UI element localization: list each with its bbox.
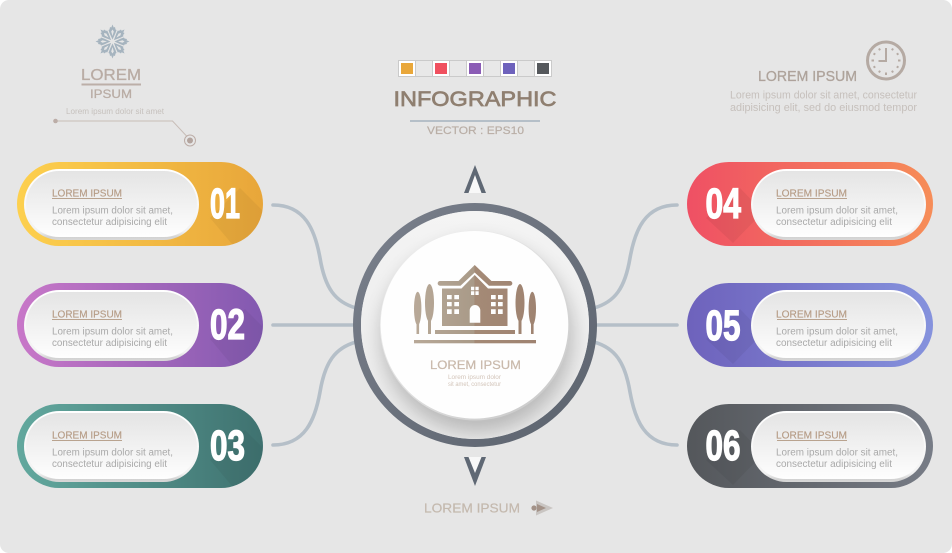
text 06 — [776, 448, 898, 470]
logo word IPSUM: IPSUM — [90, 89, 132, 101]
icon: down arrow — [464, 457, 486, 486]
number 05: 05 — [706, 303, 740, 350]
connector lines — [273, 205, 677, 445]
description: Lorem ipsum dolor sit amet, consectetur — [730, 90, 917, 102]
icon: clock — [868, 42, 904, 79]
logo caption: Lorem ipsum dolor sit amet — [66, 107, 165, 116]
text 05: Lorem ipsum dolor sit amet, — [776, 326, 898, 338]
top-right clock block — [730, 42, 917, 114]
text 02: Lorem ipsum dolor sit amet, — [52, 326, 173, 338]
heading: LOREM IPSUM — [758, 69, 857, 85]
title: INFOGRAPHIC — [394, 87, 556, 111]
hub caption: Lorem ipsum dolor — [448, 375, 501, 381]
text 06: Lorem ipsum dolor sit amet, — [776, 448, 898, 458]
pointer line with target — [53, 119, 196, 146]
hub caption: sit amet, consectetur — [448, 382, 501, 388]
text 05 — [776, 326, 898, 349]
top-left logo block — [53, 24, 196, 146]
heading 04: LOREM IPSUM — [776, 188, 847, 200]
text 03 — [52, 448, 173, 470]
text 03: consectetur adipisicing elit — [52, 459, 167, 470]
text 03: Lorem ipsum dolor sit amet, — [52, 448, 173, 458]
text 06: consectetur adipisicing elit — [776, 459, 892, 470]
text 01 — [52, 206, 173, 228]
hub caption — [448, 375, 501, 388]
panel: item 05 — [687, 283, 933, 367]
heading 02: LOREM IPSUM — [52, 310, 122, 320]
description: adipisicing elit, sed do eiusmod tempor — [730, 102, 917, 114]
text 05: consectetur adipisicing elit — [776, 338, 892, 349]
icon: snowflake emblem — [96, 24, 130, 58]
panel: item 03 — [17, 404, 275, 492]
heading 01: LOREM IPSUM — [52, 188, 122, 200]
text 02: consectetur adipisicing elit — [52, 338, 167, 349]
logo word LOREM: LOREM — [81, 67, 141, 84]
icon: footer arrow — [531, 500, 553, 516]
panel: item 06 — [687, 404, 933, 488]
text 04: Lorem ipsum dolor sit amet, — [776, 206, 898, 216]
text 04: consectetur adipisicing elit — [776, 217, 892, 228]
logo divider — [82, 84, 141, 86]
heading 06: LOREM IPSUM — [776, 430, 847, 442]
hub heading: LOREM IPSUM — [430, 360, 521, 372]
heading 03: LOREM IPSUM — [52, 430, 122, 442]
text 04 — [776, 206, 898, 228]
text 01: consectetur adipisicing elit — [52, 217, 167, 228]
text 01: Lorem ipsum dolor sit amet, — [52, 206, 173, 216]
icon: building with trees — [414, 265, 536, 343]
heading 05: LOREM IPSUM — [776, 310, 847, 320]
number 04: 04 — [706, 181, 741, 228]
number 02: 02 — [210, 302, 245, 349]
panel: item 01 — [17, 162, 270, 250]
number 01: 01 — [210, 181, 240, 228]
title divider — [410, 120, 540, 122]
footer label: LOREM IPSUM — [424, 500, 520, 516]
icon: up arrow — [464, 165, 486, 193]
panel: item 02 — [17, 283, 275, 371]
number 06: 06 — [706, 423, 740, 470]
panel: item 04 — [687, 162, 933, 246]
text 02 — [52, 326, 173, 349]
description — [730, 90, 917, 114]
central hub — [357, 207, 593, 443]
colour swatch strip — [398, 60, 552, 76]
subtitle: VECTOR : EPS10 — [427, 125, 524, 137]
number 03: 03 — [210, 423, 245, 470]
